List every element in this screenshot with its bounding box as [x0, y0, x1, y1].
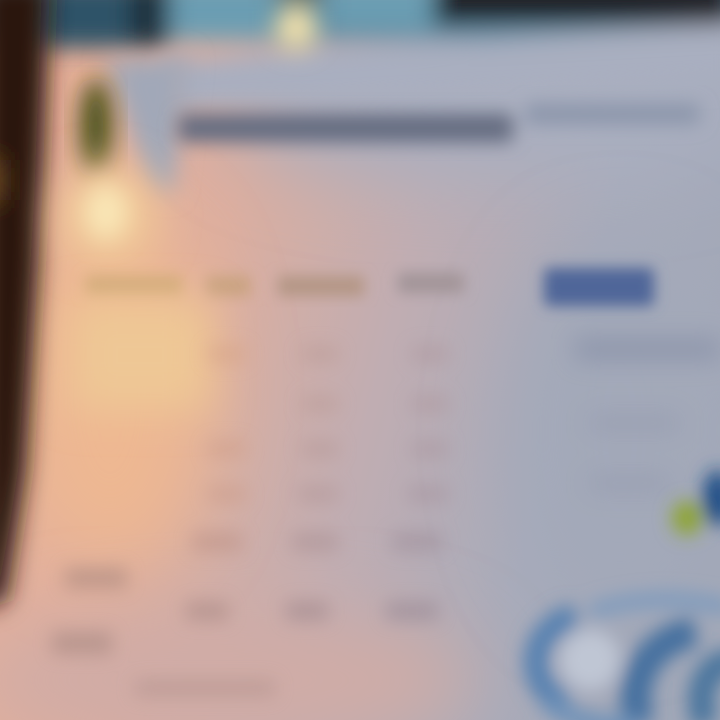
blue arc logo — [536, 600, 720, 720]
green lamp fitting — [80, 78, 112, 178]
table header row — [86, 273, 464, 296]
ceiling light — [274, 0, 318, 50]
right column text line — [575, 338, 720, 491]
table first column highlight — [70, 300, 210, 410]
green and blue logo — [672, 470, 720, 535]
top backdrop band — [0, 0, 720, 110]
dark post on left — [0, 0, 50, 610]
table data rows — [192, 346, 448, 551]
title text bar — [178, 104, 700, 142]
table footer rows — [52, 568, 438, 696]
bright lamp glow — [58, 165, 158, 265]
grey triangular pennant — [105, 55, 190, 195]
blue heading block — [544, 268, 654, 306]
